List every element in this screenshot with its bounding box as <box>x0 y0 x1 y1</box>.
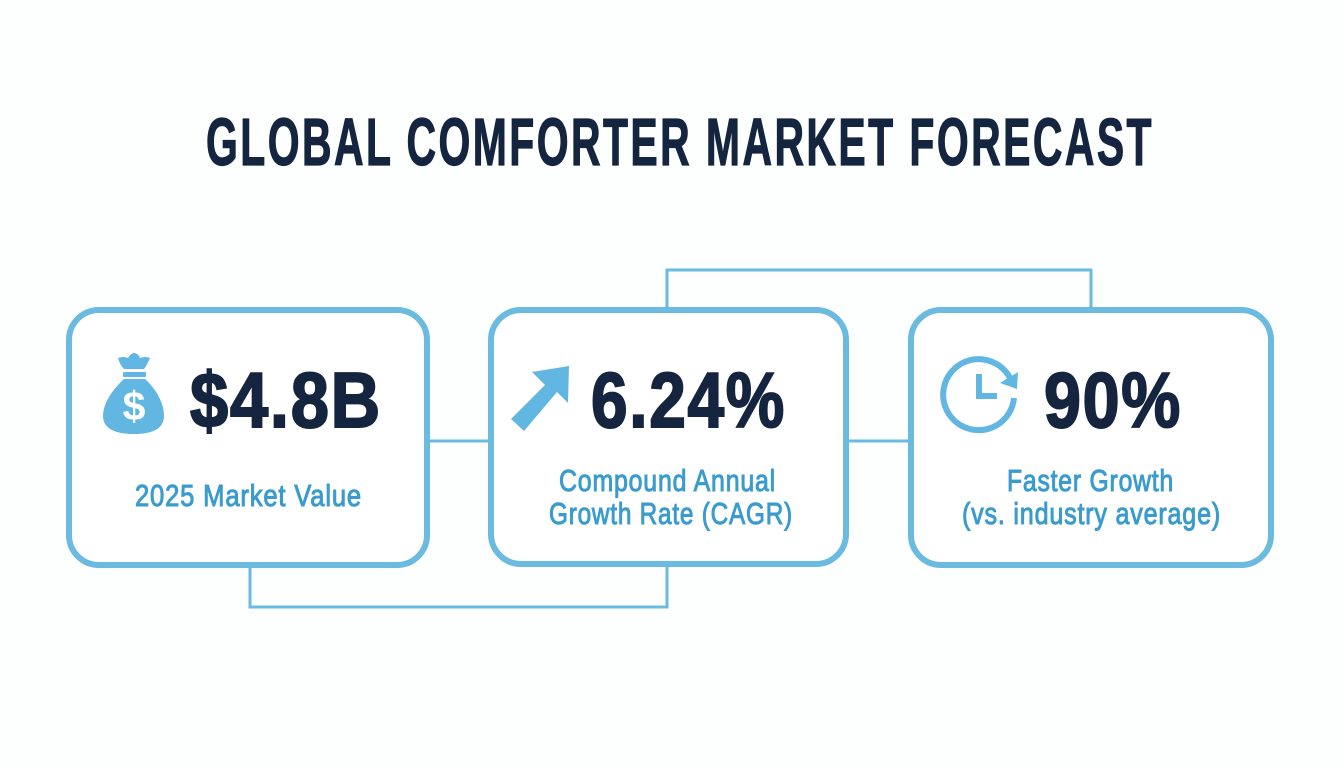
panel: CAGR <box>491 310 846 564</box>
icon: money bag <box>103 353 164 434</box>
value: $4.8B <box>190 356 382 444</box>
panel: faster growth <box>911 310 1271 565</box>
icon: clock <box>943 359 1018 430</box>
label: 2025 Market Value <box>135 478 362 513</box>
label: Faster Growth <box>1007 463 1174 498</box>
label <box>962 463 1221 531</box>
label: Growth Rate (CAGR) <box>549 496 793 531</box>
label: Compound Annual <box>559 463 776 498</box>
value: 90% <box>1044 356 1182 444</box>
label <box>549 463 793 531</box>
label: (vs. industry average) <box>962 496 1221 531</box>
connectors between cards <box>250 270 1091 607</box>
value: 6.24% <box>591 356 786 444</box>
panel: 2025 market value <box>69 310 427 565</box>
icon: money bag: $ <box>123 383 146 429</box>
icon: up arrow <box>511 366 569 431</box>
